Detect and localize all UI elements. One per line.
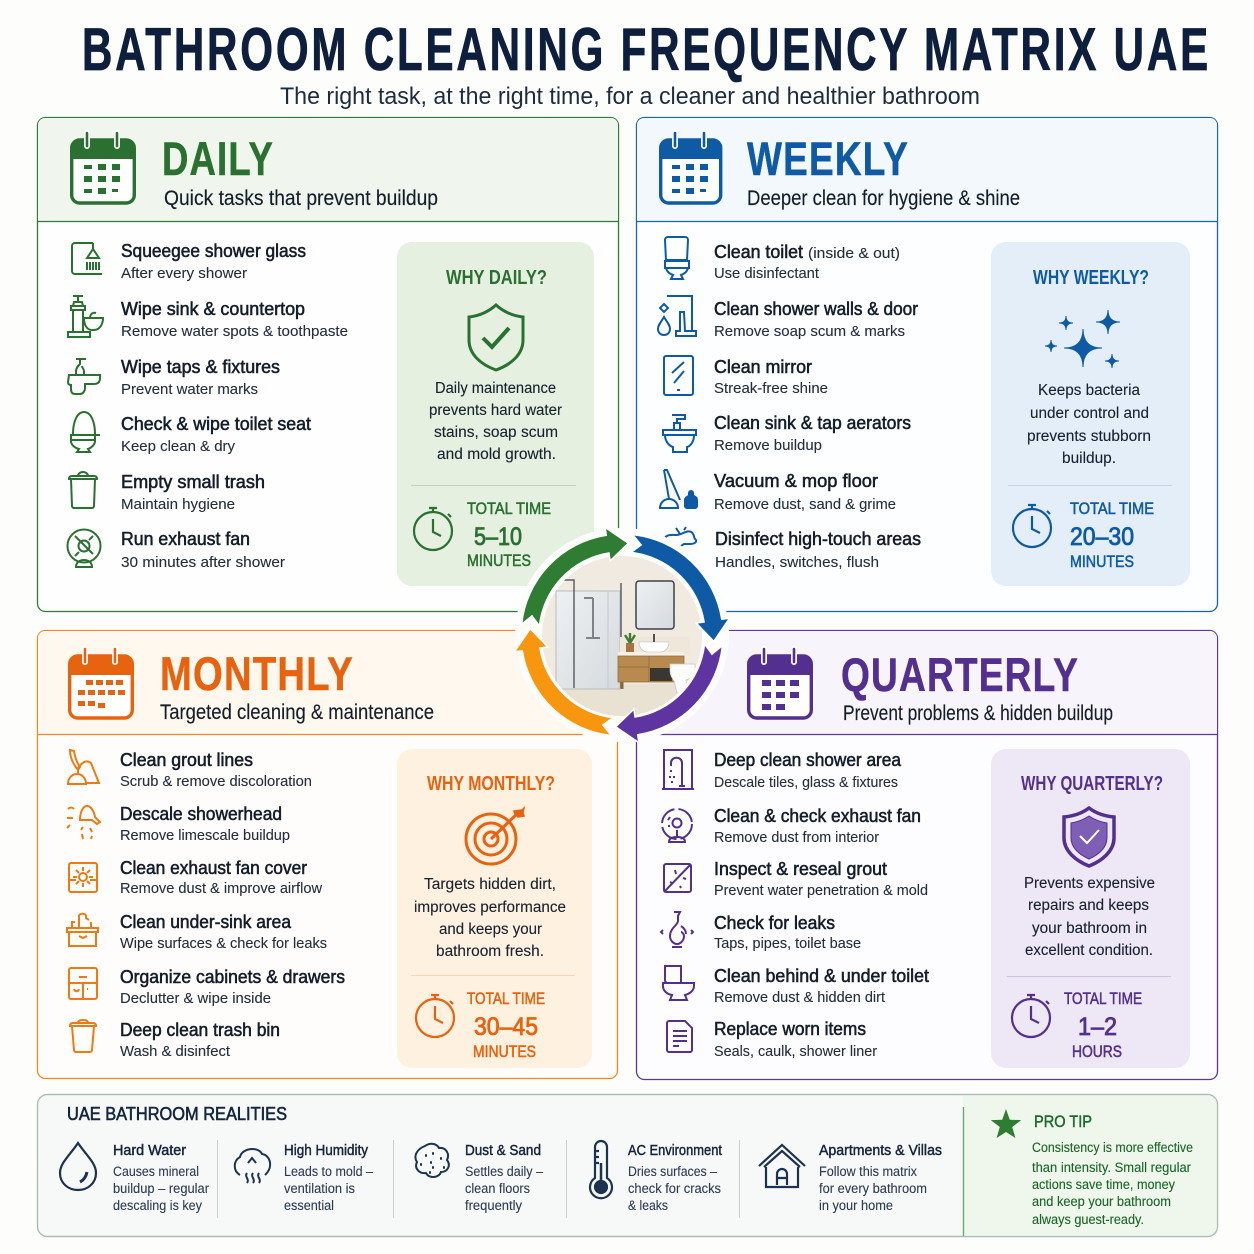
reality: AC environment: AC Environment: [628, 1143, 722, 1159]
task: squeegee shower glass: After every shower: [121, 265, 247, 282]
reality: high humidity: High Humidity: [284, 1143, 369, 1159]
task: clean toilet: Use disinfectant: [714, 265, 820, 282]
panel: quarterly: [636, 630, 1218, 1080]
text: pro tip body: and keep your bathroom: [1032, 1194, 1171, 1209]
task: reseal grout: [664, 859, 928, 899]
icon: purple shield: [1064, 808, 1114, 866]
reality: high humidity: ventilation is: [284, 1181, 355, 1196]
task: vacuum and mop: Remove dust, sand & grime: [714, 496, 896, 513]
task: grout lines: Clean grout lines: [120, 750, 253, 770]
reality: high humidity: [235, 1143, 373, 1213]
reality: apartments and villas: [759, 1143, 942, 1213]
total time: quarterly: HOURS: [1072, 1042, 1122, 1061]
task: deep clean shower: Deep clean shower area: [714, 750, 902, 770]
task: exhaust fan: Run exhaust fan: [121, 529, 250, 549]
icon: sink and soap: [68, 296, 103, 337]
text: pro tip body: actions save time, money: [1032, 1177, 1175, 1192]
task: squeegee shower glass: [72, 241, 306, 282]
task: toilet seat: Keep clean & dry: [121, 438, 235, 455]
text: why quarterly body: your bathroom in: [1032, 920, 1147, 937]
total time: quarterly: TOTAL TIME: [1064, 989, 1142, 1008]
icon: stopwatch: [1012, 995, 1050, 1037]
icon: stopwatch: [1013, 505, 1051, 547]
icon: fan cover: [69, 863, 97, 892]
panel: UAE bathroom realities: [38, 1094, 1218, 1236]
total time: quarterly: 1–2: [1078, 1013, 1117, 1041]
total time: monthly: MINUTES: [473, 1042, 536, 1061]
task: reseal grout: Inspect & reseal grout: [714, 859, 887, 879]
task: check leaks: Taps, pipes, toilet base: [714, 935, 861, 952]
task: fan cover: [69, 858, 322, 897]
reality: dust and sand: clean floors: [465, 1181, 530, 1196]
text: why monthly body: Targets hidden dirt,: [424, 876, 556, 893]
callout: why quarterly: WHY QUARTERLY?: [1021, 773, 1163, 795]
callout: why weekly: WHY WEEKLY?: [1033, 267, 1149, 289]
task: replace worn items: Seals, caulk, shower liner: [714, 1043, 877, 1060]
reality: dust and sand: frequently: [465, 1198, 522, 1213]
icon: shower glass: [72, 243, 102, 274]
task: under-sink: Clean under-sink area: [120, 912, 292, 932]
reality: high humidity: Leads to mold –: [284, 1164, 373, 1179]
total time: daily: TOTAL TIME: [467, 499, 551, 518]
icon: hand with spray: [665, 527, 696, 549]
callout: why monthly: [397, 749, 592, 1068]
icon: daily calendar: [72, 133, 134, 203]
text: why quarterly body: Prevents expensive: [1024, 875, 1155, 892]
task: wipe sink: [68, 296, 348, 340]
icon: stopwatch: [416, 995, 454, 1037]
task: wipe taps: [68, 357, 280, 398]
task: descale showerhead: [67, 804, 290, 844]
text: why quarterly body: repairs and keeps: [1028, 897, 1149, 914]
icon: sparkles: [1045, 310, 1120, 368]
total time: weekly: TOTAL TIME: [1070, 499, 1154, 518]
text: why monthly body: and keeps your: [439, 921, 542, 938]
task: under-sink: Wipe surfaces & check for leaks: [120, 935, 327, 952]
subtitle: The right task, at the right time, for a cleaner and healthier bathroom: [280, 83, 980, 110]
icon: document: [667, 1021, 692, 1052]
task: check leaks: Check for leaks: [714, 913, 835, 933]
arrow: blue: [631, 534, 730, 641]
icon: mirror: [664, 356, 693, 395]
task: cabinets: Organize cabinets & drawers: [120, 967, 345, 987]
icon: monthly calendar: [70, 649, 132, 718]
icon: water drop: [60, 1143, 96, 1190]
task: sink aerators: Remove buildup: [714, 437, 822, 454]
task: wipe sink: Remove water spots & toothpaste: [121, 323, 348, 340]
reality: AC environment: Dries surfaces –: [628, 1164, 717, 1179]
text: pro tip body: Consistency is more effective: [1032, 1140, 1193, 1155]
heading: monthly: MONTHLY: [160, 647, 354, 700]
total time: monthly: TOTAL TIME: [467, 989, 545, 1008]
reality: apartments and villas: in your home: [819, 1198, 893, 1213]
reality: hard water: Hard Water: [113, 1143, 186, 1159]
icon: showerhead: [67, 806, 100, 839]
reality: hard water: Causes mineral: [113, 1164, 199, 1179]
icon: toilet: [665, 237, 689, 279]
reality: AC environment: [590, 1141, 722, 1213]
callout: why daily: [397, 242, 594, 586]
reality: apartments and villas: Follow this matrix: [819, 1164, 917, 1179]
task: deep clean shower: [662, 750, 902, 791]
task: deep clean shower: Descale tiles, glass & fixtures: [714, 774, 898, 791]
heading: realities: UAE BATHROOM REALITIES: [67, 1104, 287, 1124]
total time: monthly: [467, 989, 545, 1061]
task: descale showerhead: Descale showerhead: [120, 804, 282, 824]
text: why daily body: Daily maintenance: [435, 380, 556, 397]
task: toilet seat: [71, 412, 311, 455]
text: why monthly body: [414, 876, 566, 960]
task: sink aerators: [663, 413, 911, 454]
task: shower walls: Remove soap scum & marks: [714, 323, 905, 340]
text: why monthly body: bathroom fresh.: [436, 943, 544, 960]
task: clean toilet: [665, 237, 900, 282]
heading: weekly: WEEKLY: [747, 132, 909, 185]
task: small trash: Empty small trash: [121, 472, 265, 492]
subheading: weekly: Deeper clean for hygiene & shine: [747, 187, 1020, 210]
icon: sink tap: [663, 415, 696, 452]
reality: hard water: [60, 1143, 209, 1213]
callout: why weekly: [991, 242, 1190, 586]
reality: hard water: descaling is key: [113, 1198, 202, 1213]
total time: daily: MINUTES: [467, 551, 531, 570]
task: descale showerhead: Remove limescale buildup: [120, 827, 290, 844]
icon: shower enclosure: [662, 750, 694, 789]
icon: thermometer: [590, 1141, 612, 1198]
task: shower walls: Clean shower walls & door: [714, 299, 918, 319]
total time: monthly: 30–45: [474, 1013, 538, 1041]
text: why quarterly body: excellent condition.: [1025, 942, 1153, 959]
task: clean toilet: (inside & out): [808, 245, 900, 262]
text: why weekly body: buildup.: [1062, 450, 1116, 467]
task: disinfect touch areas: [665, 527, 921, 571]
icon: shield check: [469, 305, 523, 370]
central cycle graphic: [514, 527, 730, 743]
task: trash bin: Deep clean trash bin: [120, 1020, 280, 1040]
icon: toilet seat: [71, 412, 100, 452]
task: toilet seat: Check & wipe toilet seat: [121, 414, 311, 434]
task: disinfect touch areas: Handles, switches, flush: [715, 554, 879, 571]
reality: apartments and villas: Apartments & Villas: [819, 1143, 942, 1159]
text: why weekly body: prevents stubborn: [1027, 428, 1151, 445]
task: exhaust fan: 30 minutes after shower: [121, 554, 285, 571]
text: why quarterly body: [1024, 875, 1155, 959]
task: behind toilet: [663, 966, 929, 1006]
subheading: monthly: Targeted cleaning & maintenance: [160, 701, 434, 724]
bathroom illustration: [542, 556, 702, 716]
panel: daily: [38, 118, 618, 612]
icon: bottle: [684, 490, 698, 509]
task: check exhaust fan: Remove dust from interior: [714, 829, 879, 846]
total time: weekly: MINUTES: [1070, 552, 1134, 571]
task: small trash: Maintain hygiene: [121, 496, 235, 513]
task: clean mirror: Clean mirror: [714, 357, 812, 377]
task: cabinets: Declutter & wipe inside: [120, 990, 271, 1007]
icon: humidity cloud: [235, 1149, 270, 1183]
text: why weekly body: under control and: [1030, 405, 1149, 422]
panel: monthly: [38, 630, 618, 1078]
task: sink aerators: Clean sink & tap aerators: [714, 413, 911, 433]
callout: pro tip: [964, 1107, 1193, 1236]
callout: why quarterly: [991, 749, 1190, 1068]
icon: trash bin: [70, 1020, 96, 1052]
task: behind toilet: Remove dust & hidden dirt: [714, 989, 886, 1006]
task: cabinets: [69, 967, 345, 1007]
icon: stopwatch: [414, 508, 452, 550]
task: wipe taps: Prevent water marks: [121, 381, 258, 398]
icon: shower wall and squeegee: [658, 296, 696, 336]
text: why daily body: and mold growth.: [437, 446, 556, 463]
text: why monthly body: improves performance: [414, 899, 566, 916]
icon: target: [466, 808, 524, 864]
icon: scrub brush: [68, 750, 99, 784]
task: vacuum and mop: [660, 470, 896, 513]
reality: dust and sand: Settles daily –: [465, 1164, 543, 1179]
task: vacuum and mop: Vacuum & mop floor: [714, 471, 878, 491]
icon: cracked tile: [664, 864, 691, 892]
task: reseal grout: Prevent water penetration & mold: [714, 882, 928, 899]
icon: dust cloud: [415, 1144, 449, 1177]
task: disinfect touch areas: Disinfect high-touch areas: [715, 529, 921, 549]
callout: pro tip: PRO TIP: [1034, 1112, 1092, 1131]
task: check exhaust fan: Clean & check exhaust fan: [714, 806, 921, 826]
reality: AC environment: check for cracks: [628, 1181, 721, 1196]
icon: mop and bottle: [660, 470, 680, 508]
icon: desk fan: [662, 809, 692, 842]
callout: why monthly: WHY MONTHLY?: [427, 773, 555, 795]
task: trash bin: Wash & disinfect: [120, 1043, 231, 1060]
icon: toilet side view: [663, 966, 694, 1000]
icon: weekly calendar: [661, 133, 721, 203]
icon: quarterly calendar: [749, 649, 811, 718]
task: clean toilet: Clean toilet: [714, 242, 803, 262]
reality: hard water: buildup – regular: [113, 1181, 209, 1196]
task: replace worn items: Replace worn items: [714, 1019, 866, 1039]
task: wipe sink: Wipe sink & countertop: [121, 299, 305, 319]
arrow: purple: [616, 644, 722, 743]
text: pro tip body: always guest-ready.: [1032, 1212, 1144, 1227]
icon: trash can: [69, 472, 97, 508]
text: why daily body: stains, soap scum: [434, 424, 558, 441]
task: fan cover: Remove dust & improve airflow: [120, 880, 322, 897]
text: pro tip body: [1032, 1140, 1193, 1227]
subheading: quarterly: Prevent problems & hidden buildup: [843, 702, 1113, 725]
icon: pipe leak: [661, 912, 693, 947]
task: clean mirror: Streak-free shine: [714, 380, 828, 397]
task: squeegee shower glass: Squeegee shower glass: [121, 241, 306, 261]
arrow: green: [522, 527, 628, 626]
icon: cabinet: [69, 968, 97, 999]
total time: daily: 5–10: [474, 523, 522, 551]
task: under-sink: [67, 912, 327, 952]
task: grout lines: Scrub & remove discoloration: [120, 773, 312, 790]
reality: dust and sand: Dust & Sand: [465, 1143, 541, 1159]
total time: quarterly: [1064, 989, 1142, 1061]
total time: daily: [467, 499, 551, 570]
task: replace worn items: [667, 1019, 877, 1060]
text: pro tip body: than intensity. Small regular: [1032, 1160, 1191, 1175]
icon: tap: [68, 359, 100, 394]
task: small trash: [69, 472, 265, 513]
reality: AC environment: & leaks: [628, 1198, 668, 1213]
heading: quarterly: QUARTERLY: [841, 648, 1079, 701]
icon: sink cabinet: [67, 914, 98, 946]
total time: weekly: [1070, 499, 1154, 571]
task: fan cover: Clean exhaust fan cover: [120, 858, 307, 878]
icon: star: [991, 1109, 1021, 1138]
arrow: orange: [514, 629, 613, 736]
task: behind toilet: Clean behind & under toilet: [714, 966, 929, 986]
icon: house: [759, 1145, 805, 1187]
subheading: daily: Quick tasks that prevent buildup: [164, 187, 438, 210]
task: check exhaust fan: [662, 806, 921, 846]
reality: apartments and villas: for every bathroom: [819, 1181, 927, 1196]
task: shower walls: [658, 296, 918, 340]
task: wipe taps: Wipe taps & fixtures: [121, 357, 280, 377]
task: exhaust fan: [68, 529, 285, 571]
task: trash bin: [70, 1020, 280, 1060]
total time: weekly: 20–30: [1070, 523, 1134, 551]
text: why weekly body: [1027, 382, 1151, 467]
reality: dust and sand: [415, 1143, 543, 1213]
heading: daily: DAILY: [162, 132, 274, 185]
text: why weekly body: Keeps bacteria: [1038, 382, 1140, 399]
reality: high humidity: essential: [284, 1198, 334, 1213]
task: grout lines: [68, 750, 312, 790]
callout: why daily: WHY DAILY?: [446, 267, 547, 289]
task: clean mirror: [664, 356, 828, 397]
text: why daily body: [429, 380, 562, 463]
icon: fan: [68, 530, 100, 567]
text: why daily body: prevents hard water: [429, 402, 562, 419]
task: check leaks: [661, 912, 861, 952]
panel: weekly: [636, 118, 1218, 612]
